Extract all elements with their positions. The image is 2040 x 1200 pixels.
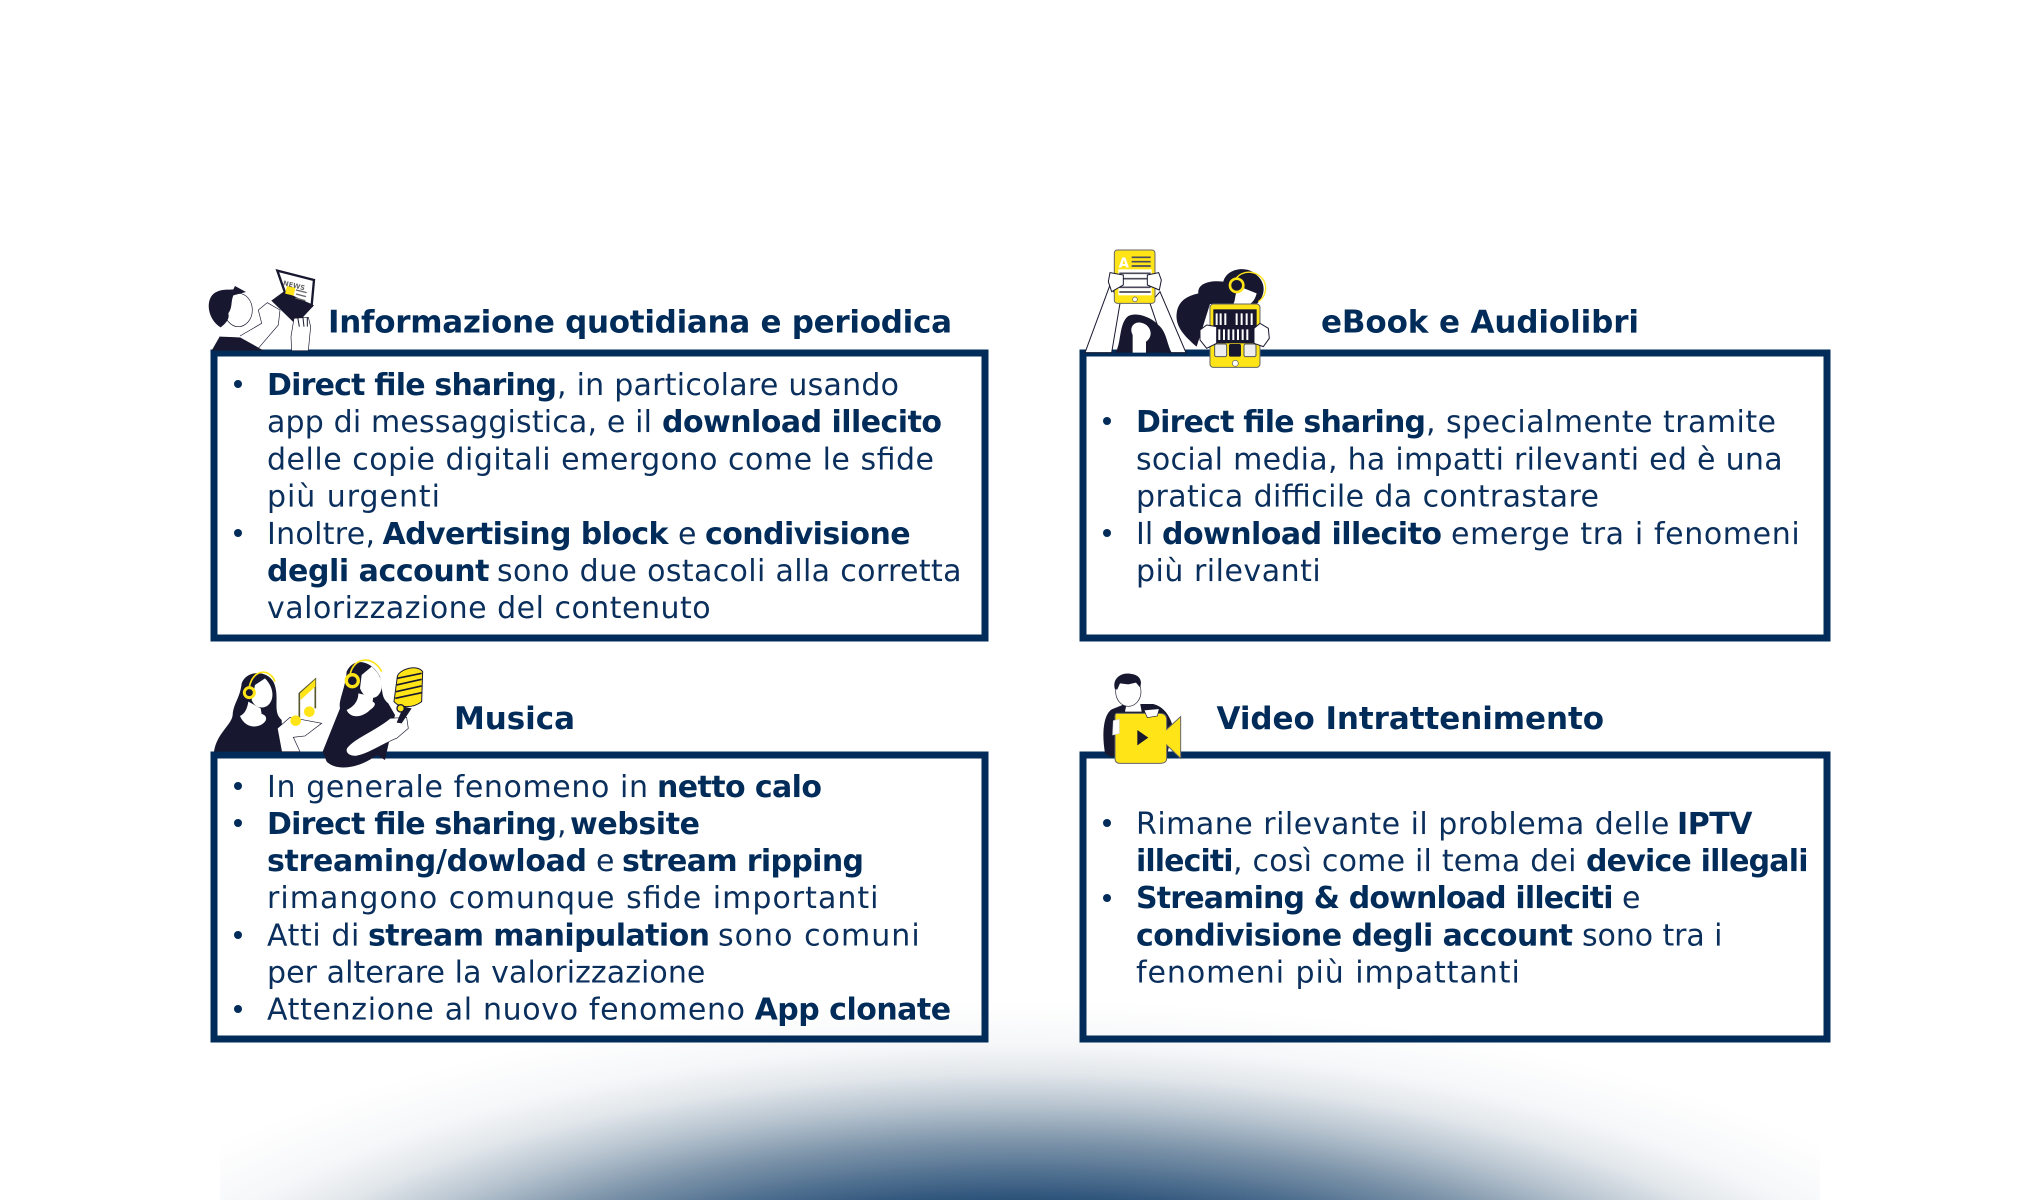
bullet list <box>234 770 951 1027</box>
bullet list: Inoltre, <box>267 517 375 552</box>
bullet list: stream ripping <box>622 844 864 879</box>
bullet list: pratica difficile da contrastare <box>1136 480 1599 515</box>
bullet list: download illecito <box>1162 517 1442 552</box>
bullet list: per alterare la valorizzazione <box>267 955 705 990</box>
bullet list: delle copie digitali emergono come le sfide <box>267 442 934 477</box>
panel: Video Intrattenimento <box>1083 674 1827 1039</box>
bullet list: più urgenti <box>267 480 440 515</box>
bullet list: Direct file sharing <box>267 807 557 842</box>
bullet list: Il <box>1136 517 1153 552</box>
bullet list: , in particolare usando <box>557 368 899 403</box>
bullet list: website <box>570 807 700 842</box>
panel frame <box>1083 353 1827 638</box>
bullet list: Streaming & download illeciti <box>1136 881 1614 916</box>
bullet list: , specialmente tramite <box>1426 405 1776 440</box>
panel: Informazione quotidiana e periodica <box>209 271 985 638</box>
icon: person reading news on a tablet <box>209 271 314 351</box>
bullet list: Direct file sharing <box>267 368 557 403</box>
panel frame <box>1083 755 1827 1039</box>
icon: listeners with headphones, music note and microphone <box>214 660 423 767</box>
bullet list: , <box>557 807 567 842</box>
bullet list: fenomeni più impattanti <box>1136 955 1520 990</box>
bullet list: condivisione <box>705 517 911 552</box>
bullet list: device illegali <box>1586 844 1808 879</box>
heading: Informazione quotidiana e periodica <box>328 305 952 341</box>
bullet list: Rimane rilevante il problema delle <box>1136 807 1669 842</box>
icon: person reading news on a tablet: NEWS <box>282 279 306 292</box>
bullet list: Attenzione al nuovo fenomeno <box>267 992 745 1027</box>
bullet list: emerge tra i fenomeni <box>1451 517 1800 552</box>
bullet list: Atti di <box>267 918 359 953</box>
bullet list: e <box>1622 881 1640 916</box>
bullet list: e <box>678 517 696 552</box>
bullet list: netto calo <box>657 770 822 805</box>
panel frame <box>214 755 985 1039</box>
icon: people with ebook and audiobook tablets: A <box>1119 256 1130 271</box>
background glow <box>220 995 1820 1200</box>
bullet list: sono due ostacoli alla corretta <box>497 554 962 589</box>
bullet list: valorizzazione del contenuto <box>267 591 711 626</box>
icon: person holding a video camera <box>1103 674 1181 763</box>
bullet list: IPTV <box>1677 807 1753 842</box>
bullet list <box>1103 807 1808 990</box>
bullet list: illeciti <box>1136 844 1234 879</box>
bullet list: rimangono comunque sfide importanti <box>267 881 878 916</box>
bullet list: Advertising block <box>382 517 670 552</box>
panel: eBook e Audiolibri <box>1083 250 1827 638</box>
heading: Musica <box>454 701 575 737</box>
bullet list: download illecito <box>662 405 942 440</box>
bullet list: social media, ha impatti rilevanti ed è una <box>1136 442 1783 477</box>
panel: Musica <box>214 660 985 1039</box>
bullet list: streaming/dowload <box>267 844 587 879</box>
bullet list: sono comuni <box>718 918 920 953</box>
bullet list: più rilevanti <box>1136 554 1321 589</box>
bullet list: sono tra i <box>1582 918 1722 953</box>
bullet list: degli account <box>267 554 490 589</box>
bullet list: app di messaggistica, e il <box>267 405 652 440</box>
heading: Video Intrattenimento <box>1216 701 1604 737</box>
bullet list: stream manipulation <box>368 918 710 953</box>
bullet list: condivisione degli account <box>1136 918 1573 953</box>
bullet list: In generale fenomeno in <box>267 770 648 805</box>
icon: people with ebook and audiobook tablets <box>1085 250 1269 367</box>
bullet list: , così come il tema dei <box>1233 844 1576 879</box>
bullet list <box>1103 405 1800 589</box>
bullet list: Direct file sharing <box>1136 405 1426 440</box>
heading: eBook e Audiolibri <box>1321 305 1639 341</box>
bullet list: e <box>596 844 614 879</box>
bullet list: App clonate <box>755 992 951 1027</box>
bullet list <box>234 368 962 626</box>
panel frame <box>214 353 985 638</box>
